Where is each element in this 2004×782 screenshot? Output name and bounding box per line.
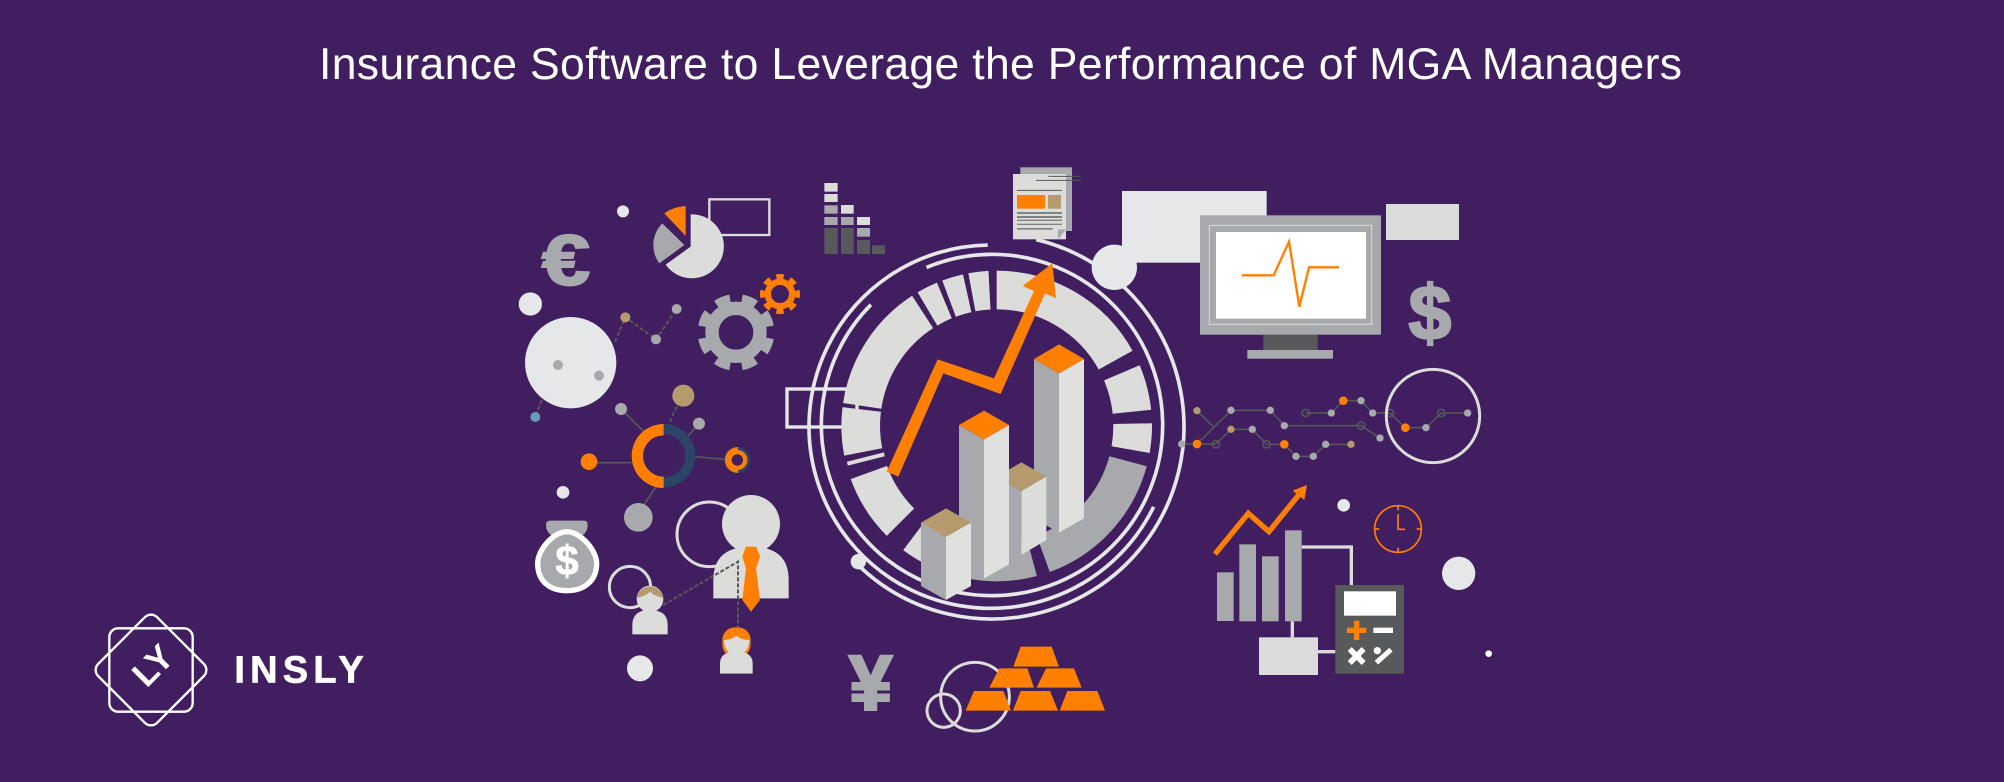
ring around network (1386, 369, 1480, 463)
circular dial with segments (747, 183, 1234, 670)
icon: pie chart (653, 206, 724, 278)
icon: clock (1375, 506, 1421, 552)
circle over ring (1092, 245, 1137, 290)
overlapping rings (927, 662, 1009, 731)
inner ring (769, 202, 1215, 648)
icon: document (1013, 167, 1081, 239)
title: Insurance Software to Leverage the Performance of MGA Managers (319, 40, 1682, 89)
people: manager and team (609, 495, 789, 674)
light rectangle (1122, 191, 1267, 263)
icon: orange gear (760, 274, 800, 314)
decorative dot (557, 486, 569, 499)
icon: stacked bars (824, 183, 885, 254)
icon: euro sign: € (542, 220, 590, 300)
small circle on ring (851, 554, 866, 569)
3D building bars (921, 344, 1084, 600)
large circle node (525, 317, 616, 408)
logo: Insly: INSLY (234, 650, 364, 692)
icon: monitor with pulse line (1200, 215, 1381, 359)
growth arrow (887, 263, 1056, 477)
bar chart with calculator (1215, 485, 1351, 675)
decorative dot (627, 655, 653, 681)
icon: yen sign: ¥ (849, 642, 892, 727)
decorative white dot (617, 205, 629, 217)
icon: money bag: $ (555, 537, 579, 584)
middle ring (747, 183, 1234, 670)
icon: money bag (538, 521, 597, 591)
light rectangle small (1386, 204, 1459, 240)
decorative dot (519, 292, 542, 316)
icon: donut chart with connected nodes (581, 385, 750, 532)
outlined rectangle behind dial (787, 389, 857, 427)
icon: outlined rectangle behind pie (709, 199, 769, 235)
logo: Insly (92, 611, 364, 729)
outer ring (760, 195, 1223, 658)
logo: Insly: LY (125, 637, 182, 694)
icon: gold bars (966, 647, 1105, 711)
icon: gray gear (688, 285, 784, 380)
icon: dollar sign: $ (1409, 271, 1451, 356)
dashed connector with nodes (530, 304, 682, 422)
icon: calculator (1335, 585, 1404, 674)
decorative dots (1337, 499, 1492, 657)
network line chart (1178, 396, 1471, 460)
